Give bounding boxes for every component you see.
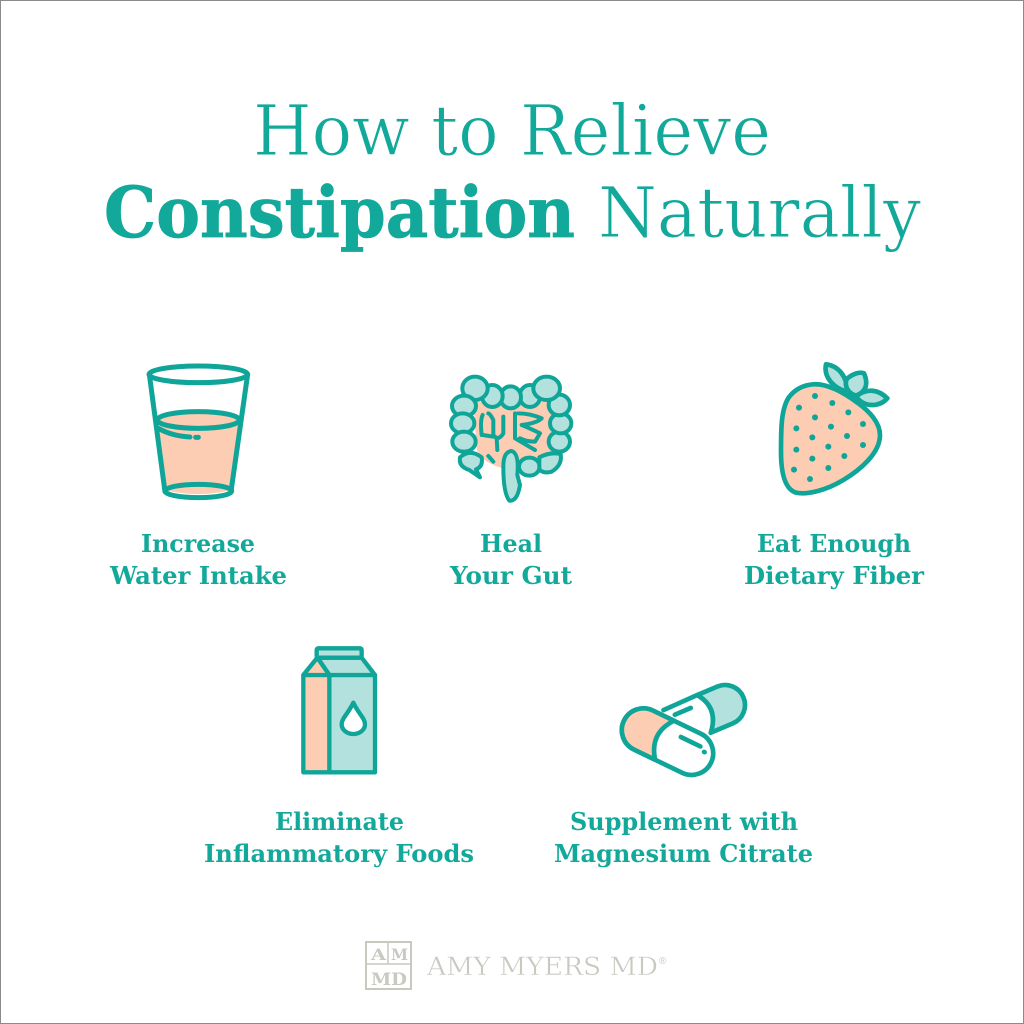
icon: milk carton bbox=[303, 648, 375, 772]
label: Supplement with Magnesium Citrate: Magnesium Citrate bbox=[554, 839, 813, 868]
label: Eliminate Inflammatory Foods bbox=[204, 807, 474, 868]
title: Constipation bbox=[104, 171, 575, 254]
logo: Amy Myers MD: A bbox=[370, 945, 387, 964]
label: Heal Your Gut bbox=[449, 529, 572, 590]
label: Eat Enough Dietary Fiber: Eat Enough bbox=[757, 529, 911, 558]
label: Eat Enough Dietary Fiber bbox=[744, 529, 924, 590]
label: Heal Your Gut: Heal bbox=[480, 529, 542, 558]
label: Supplement with Magnesium Citrate bbox=[554, 807, 813, 868]
label: Increase Water Intake: Increase bbox=[141, 529, 255, 558]
logo: Amy Myers MD: MD bbox=[371, 970, 407, 990]
title: Naturally bbox=[598, 172, 921, 254]
label: Eliminate Inflammatory Foods: Eliminate bbox=[275, 807, 404, 836]
icon: strawberry bbox=[781, 364, 887, 493]
label: Eat Enough Dietary Fiber: Dietary Fiber bbox=[744, 561, 924, 590]
title bbox=[104, 90, 921, 254]
label: Heal Your Gut: Your Gut bbox=[449, 561, 572, 590]
label: Eliminate Inflammatory Foods: Inflammatory Foods bbox=[204, 839, 474, 868]
logo: Amy Myers MD bbox=[366, 942, 667, 990]
label: Increase Water Intake bbox=[109, 529, 287, 590]
icon: capsules bbox=[615, 679, 751, 782]
logo: Amy Myers MD: M bbox=[391, 945, 408, 964]
label: Supplement with Magnesium Citrate: Supplement with bbox=[570, 807, 798, 836]
logo: Amy Myers MD: AMY MYERS MD bbox=[426, 952, 658, 981]
logo: Amy Myers MD: ® bbox=[659, 956, 667, 967]
icon: intestines bbox=[451, 377, 571, 501]
icon: glass of water bbox=[149, 366, 248, 498]
label: Increase Water Intake: Water Intake bbox=[109, 561, 287, 590]
title: How to Relieve bbox=[253, 90, 771, 172]
